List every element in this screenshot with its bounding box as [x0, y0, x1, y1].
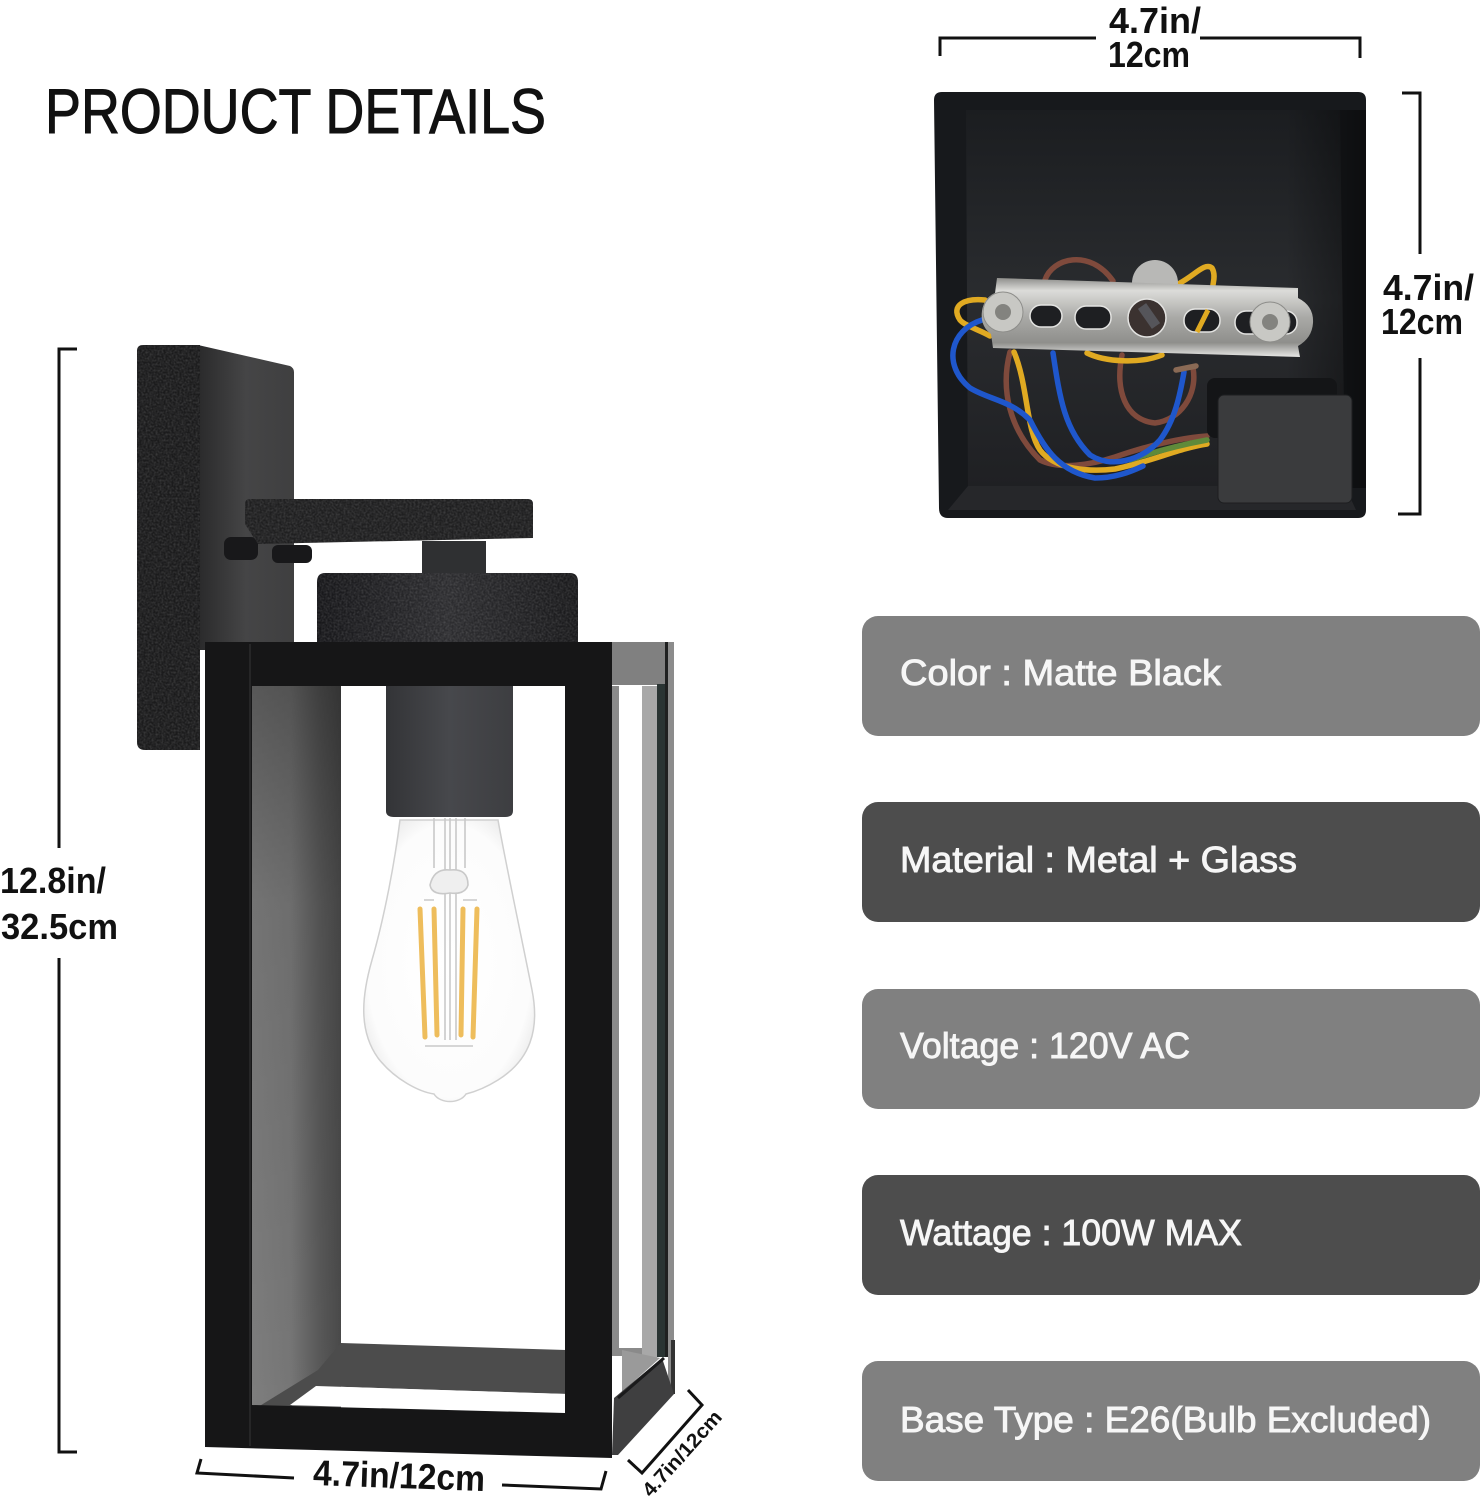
glass stem [424, 818, 477, 1046]
bulb socket [386, 686, 513, 817]
mounting box back view [934, 92, 1366, 518]
spec: material: Material : Metal + Glass [900, 839, 1297, 880]
bulb glass [364, 820, 535, 1102]
height dimension: 12.8in / 32.5cm: 32.5cm [1, 906, 118, 947]
spec: voltage: Voltage : 120V AC [900, 1025, 1190, 1066]
mounting screws [224, 537, 312, 563]
spec: voltage [862, 989, 1480, 1109]
interior floor opening [290, 1386, 568, 1414]
box right shadow [966, 110, 1366, 488]
interior left wall [250, 686, 341, 1411]
side height dimension: 4.7in/12cm [1381, 93, 1474, 514]
backplate [137, 345, 294, 750]
top cap [317, 573, 578, 642]
support arm [245, 499, 533, 544]
box bottom wall [948, 486, 1356, 510]
spec: wattage [862, 1175, 1480, 1295]
frame corner seam [249, 644, 251, 1446]
center screw [1132, 260, 1178, 306]
spec: wattage: Wattage : 100W MAX [900, 1212, 1242, 1253]
wall lantern illustration [137, 345, 675, 1458]
spec: base type [862, 1361, 1480, 1481]
wiring [953, 260, 1214, 478]
stem [422, 541, 486, 574]
side height dimension: 4.7in/12cm: 4.7in/ [1383, 267, 1474, 308]
spec: color [862, 616, 1480, 736]
box body [934, 92, 1366, 518]
lantern side panel [612, 642, 675, 1455]
depth dimension: 4.7in/12cm [628, 1390, 727, 1500]
depth dimension: 4.7in/12cm: 4.7in/12cm [638, 1406, 727, 1500]
metal mounting strap [982, 278, 1313, 357]
junction block [1207, 378, 1352, 503]
box inner recess [966, 110, 1345, 488]
spec: base type: Base Type : E26(Bulb Excluded) [900, 1399, 1431, 1440]
top width dimension: 4.7in/12cm [940, 0, 1360, 75]
height dimension: 12.8in / 32.5cm: 12.8in/ [0, 860, 106, 901]
bottom width dimension: 4.7in/12cm: 4.7in/12cm [312, 1452, 486, 1499]
spec: color: Color : Matte Black [900, 652, 1222, 693]
bottom width dimension: 4.7in/12cm [197, 1452, 606, 1499]
filaments [420, 909, 477, 1037]
light bulb [364, 818, 535, 1102]
side height dimension: 4.7in/12cm: 12cm [1381, 301, 1463, 342]
title: PRODUCT DETAILS [45, 77, 546, 147]
lantern front frame [205, 642, 612, 1458]
top width dimension: 4.7in/12cm: 12cm [1108, 34, 1190, 75]
spec: material [862, 802, 1480, 922]
top width dimension: 4.7in/12cm: 4.7in/ [1109, 0, 1201, 41]
height dimension: 12.8in / 32.5cm [0, 349, 118, 1452]
interior back bottom bar [258, 1343, 566, 1407]
